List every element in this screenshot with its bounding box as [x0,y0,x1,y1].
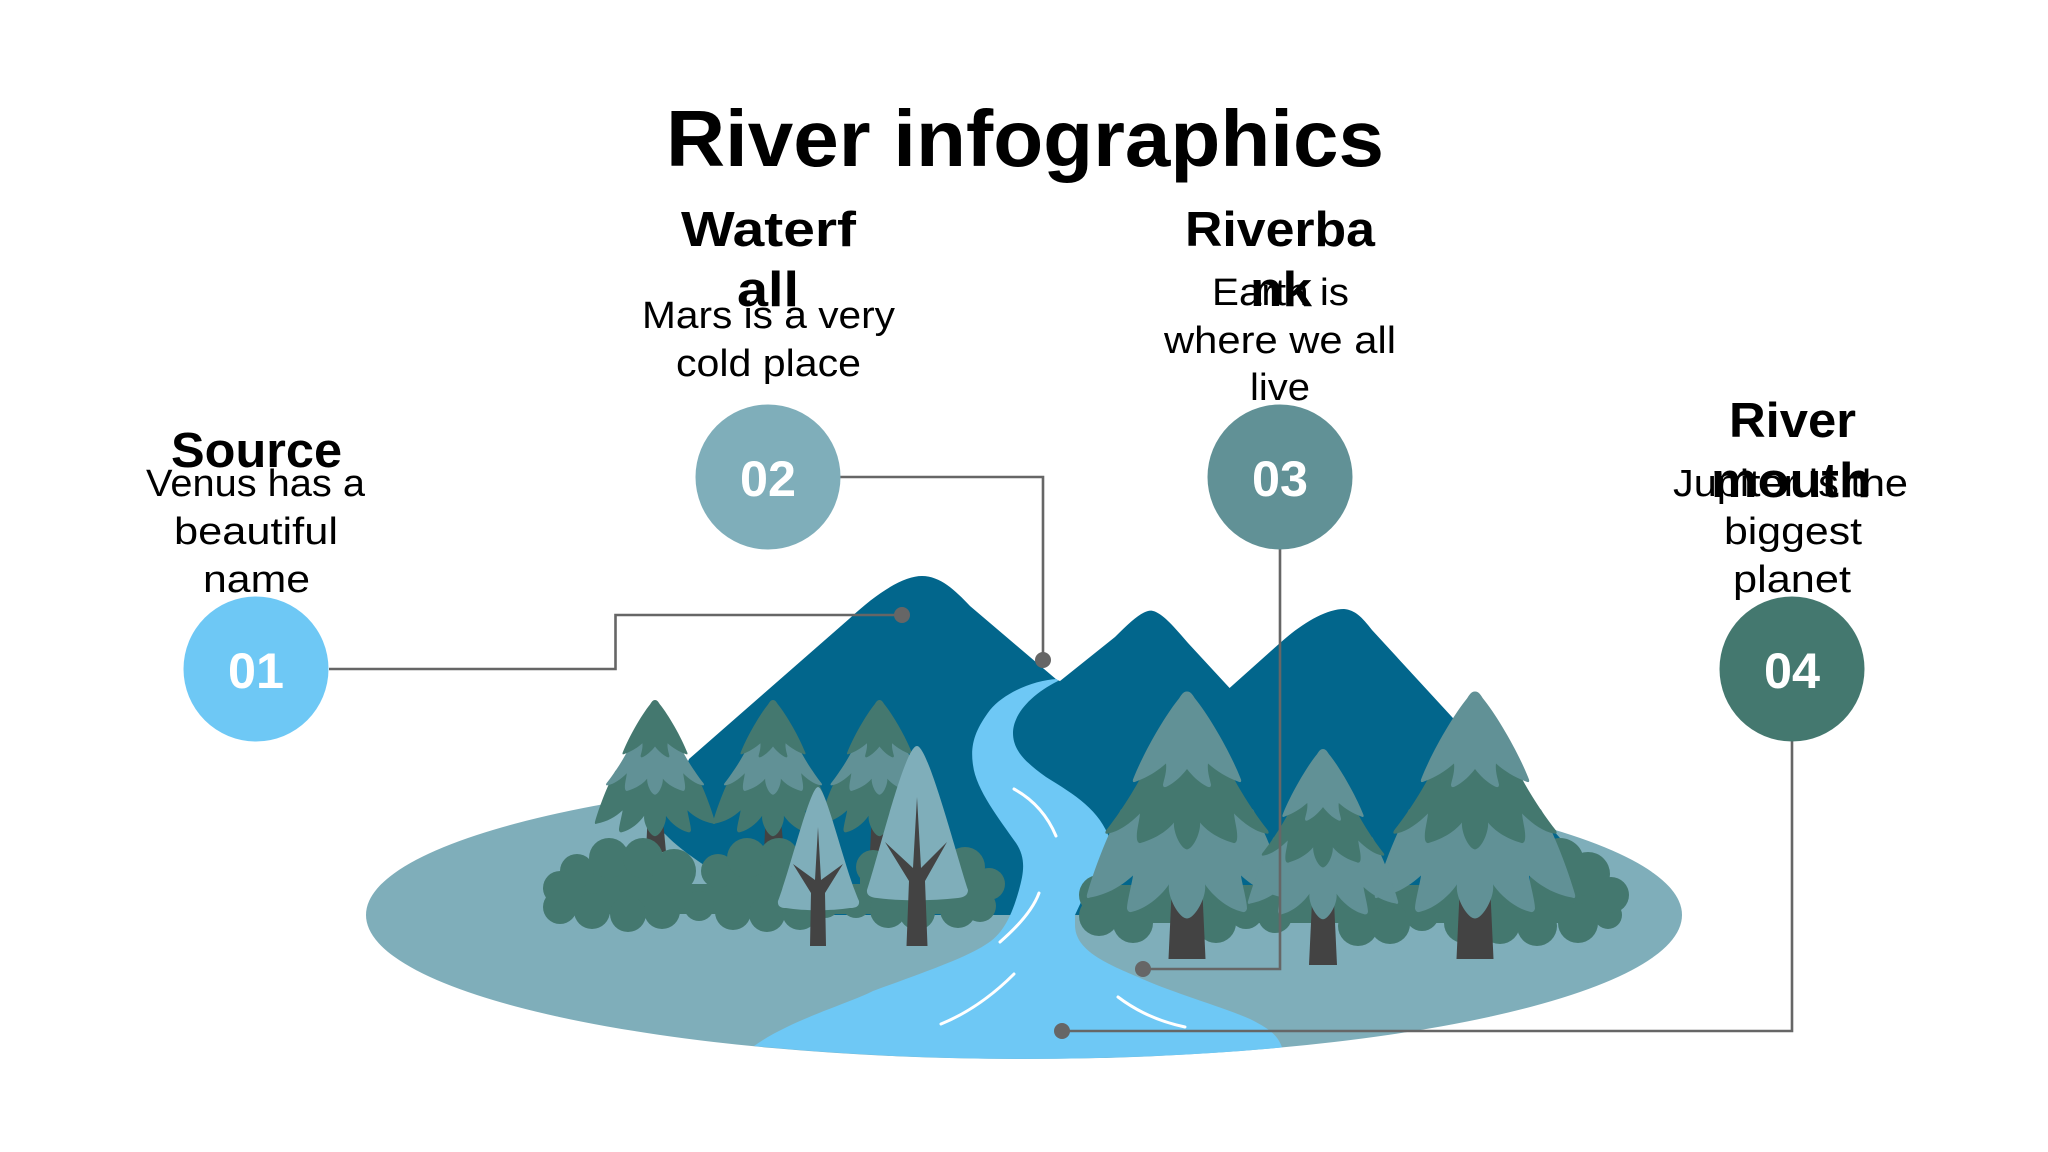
connector 02: waterfall [840,477,1051,668]
land ellipse [366,771,1682,1059]
heading: Waterfall: all [737,263,799,317]
step 04 circle [1720,596,1864,742]
description: Riverbank: live [1250,367,1310,409]
description: River mouth: planet [1733,559,1851,601]
description: River mouth: biggest [1724,511,1862,553]
title: River infographics [666,94,1384,183]
step 02 circle: 02 [740,451,796,507]
step 01 circle: 01 [228,643,284,699]
heading: River mouth [1711,394,1871,508]
river current lines [941,789,1185,1027]
description: Riverbank: where we all [1163,320,1396,362]
step 04 circle: 04 [1764,643,1820,699]
heading: Riverbank [1185,203,1376,317]
back pine tree 3 [819,700,940,852]
heading: River mouth: River [1729,394,1856,448]
description: Source: Venus has a [146,463,366,505]
heading: Riverbank: nk [1250,263,1313,317]
description: Source [146,463,366,601]
heading: River mouth: mouth [1711,454,1871,508]
big pine tree B [1375,692,1575,959]
description: Waterfall: cold place [676,343,861,385]
connector 04: river mouth [1054,741,1792,1039]
connector 03: riverbank [1135,549,1280,977]
big pine tree A [1087,692,1287,959]
right bushes [1079,838,1629,946]
description: Riverbank [1163,272,1396,409]
description: Source: beautiful [174,511,338,553]
heading: Riverbank: Riverba [1185,203,1376,257]
step 03 circle: 03 [1252,451,1308,507]
description: Waterfall [642,295,895,385]
description: River mouth [1673,463,1908,601]
description: Source: name [203,559,310,601]
step 03 circle [1208,404,1352,550]
middle pine tree C [1248,749,1398,965]
description: Waterfall: Mars is a very [642,295,895,337]
back pine tree 1 [595,700,715,852]
heading: Waterfall: Waterf [681,203,857,257]
left bushes [543,838,1005,932]
description: River mouth: Jupiter is the [1673,463,1908,505]
small light tree [778,787,859,946]
step 01 circle [184,596,328,742]
description: Riverbank: Earth is [1212,272,1349,314]
illustration: river landscape [366,576,1682,1059]
river [754,679,1282,1059]
heading: Waterfall [681,203,857,317]
heading: Source: Source [171,424,342,478]
step 02 circle [696,404,840,550]
back pine tree 2 [713,700,833,852]
large light tree [867,746,968,946]
connector 01: source [329,607,910,669]
mountains [660,576,1560,915]
